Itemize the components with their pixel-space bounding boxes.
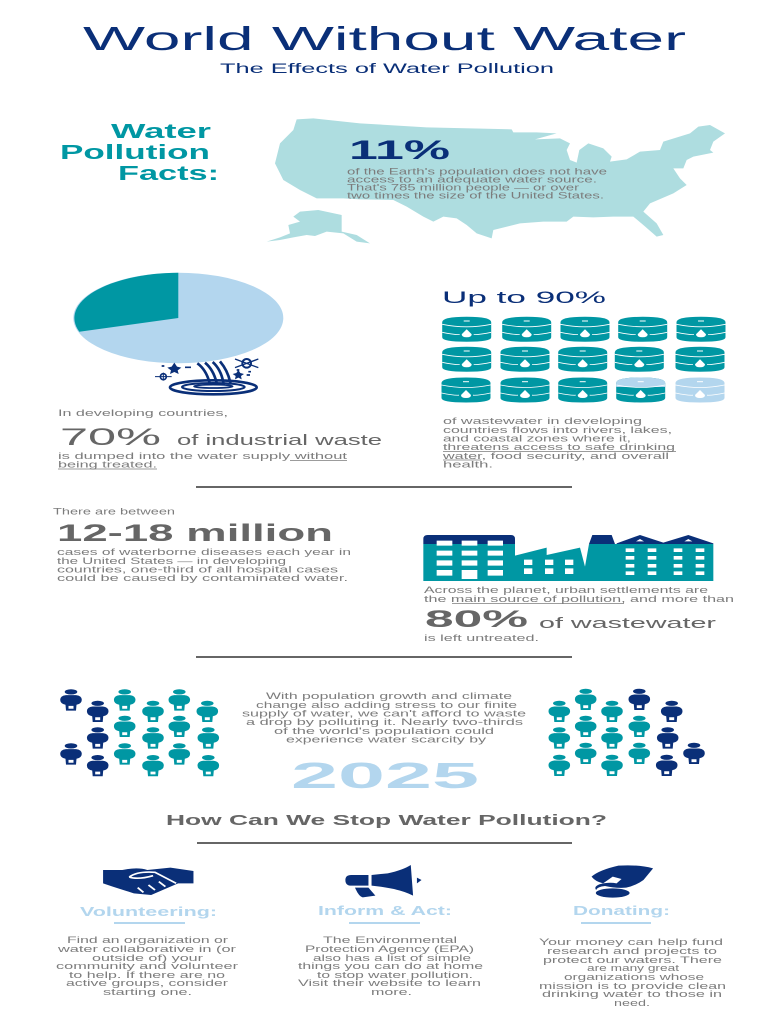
- map: United States: [267, 118, 725, 243]
- column: volunteering: outside of) your: [92, 953, 203, 963]
- text: wastewater description: and coastal zones where it,: [443, 434, 631, 444]
- column: volunteering: active groups, consider: [66, 978, 228, 988]
- column: volunteering: to help. If there are no: [69, 970, 225, 980]
- column: inform and act: things you can do at home: [298, 961, 483, 971]
- icon: handshake: [103, 868, 193, 895]
- text: wastewater description: of wastewater in developing: [443, 416, 642, 426]
- text: 80% of wastewater: the main source of pollution, and more than: [424, 594, 734, 604]
- text: 70% of industrial waste: of industrial waste: [177, 432, 382, 449]
- text: wastewater description: health.: [443, 460, 493, 470]
- text: 12-18 million: There are between: [53, 506, 175, 516]
- text: water scarcity: a drop by polluting it. Nearly two-thirds: [246, 717, 524, 727]
- column: inform and act: Protection Agency (EPA): [305, 944, 474, 954]
- column: donating: Donating:: [573, 903, 670, 918]
- column: donating: need.: [614, 998, 650, 1008]
- icon: factory and city skyline: [423, 535, 713, 581]
- text: 11% description: two times the size of the United States.: [347, 190, 604, 200]
- text: wastewater description: countries flows into rivers, lakes,: [443, 425, 672, 435]
- text: water scarcity: change also adding stress to our finite: [256, 700, 517, 710]
- column: donating: protect our waters. There: [543, 955, 722, 965]
- text: 70% of industrial waste: [58, 408, 382, 470]
- column: volunteering: Find an organization or: [67, 935, 228, 945]
- text: wastewater description: water, food security, and overall: [441, 451, 669, 461]
- icon group: people right: [548, 689, 705, 776]
- column: donating: Your money can help fund: [539, 937, 723, 947]
- icon: polluted waterfall: [155, 359, 258, 394]
- text: 12-18 million: could be caused by contaminated water.: [57, 573, 348, 583]
- icon group: people left: [60, 689, 219, 776]
- column: inform and act: to stop water pollution.: [317, 970, 473, 980]
- column: donating: research and projects to: [547, 946, 717, 956]
- heading: water pollution facts: [60, 121, 219, 185]
- column: volunteering: community and volunteer: [56, 961, 238, 971]
- text: 11% description: [347, 166, 607, 200]
- text: 11% description: That's 785 million people — or over: [347, 182, 579, 192]
- column: volunteering: Volunteering:: [80, 904, 217, 919]
- heading: how can we stop water pollution: How Can We Stop Water Pollution?: [166, 812, 607, 829]
- text: wastewater description: [441, 416, 676, 470]
- column: donating: are many great: [587, 963, 680, 973]
- column: inform and act: The Environmental: [323, 935, 457, 945]
- text: 80% of wastewater: [424, 585, 734, 643]
- text: 70% of industrial waste: In developing countries,: [58, 408, 228, 418]
- text: water scarcity: of the world's population could: [274, 726, 494, 736]
- text: water scarcity: [242, 691, 526, 744]
- heading: water pollution facts: Pollution: [60, 142, 210, 164]
- text: 80% of wastewater: of wastewater: [539, 616, 716, 632]
- text: water scarcity: supply of water, we can't afford to waste: [242, 708, 526, 718]
- pie chart: 70% industrial waste: [73, 273, 283, 363]
- stat: 11%: 11%: [349, 135, 450, 165]
- text: 11% description: of the Earth's population does not have: [347, 166, 607, 176]
- text: 80% of wastewater: 80%: [425, 606, 528, 633]
- text: 70% of industrial waste: 70%: [60, 424, 161, 451]
- column: inform and act: Visit their website to learn: [298, 978, 481, 988]
- heading: water pollution facts: Facts:: [118, 163, 219, 185]
- heading: up to 90%: Up to 90%: [442, 288, 606, 307]
- text: 12-18 million: countries, one-third of all hospital cases: [57, 564, 339, 574]
- icon: megaphone: [345, 865, 422, 897]
- column: inform and act: Inform & Act:: [318, 903, 452, 918]
- heading: water pollution facts: Water: [111, 121, 211, 143]
- text: 11% description: access to an adequate water source.: [347, 174, 597, 184]
- text: 12-18 million: cases of waterborne diseases each year in: [57, 547, 351, 557]
- column: volunteering: water collaborative in (or: [56, 944, 236, 954]
- text: 12-18 million: the United States — in developing: [57, 556, 286, 566]
- column: inform and act: also has a list of simple: [313, 953, 471, 963]
- column: donating: organizations whose: [564, 972, 704, 982]
- text: 80% of wastewater: Across the planet, urban settlements are: [424, 585, 708, 595]
- text: water scarcity: With population growth and climate: [266, 691, 512, 701]
- column: inform and act: [298, 903, 483, 997]
- icon grid: wastewater barrels: [442, 317, 726, 402]
- column: donating: drinking water to those in: [542, 989, 722, 999]
- column: volunteering: [56, 904, 238, 997]
- icon: hand giving coin: [592, 865, 653, 898]
- text: wastewater description: threatens access to safe drinking: [443, 442, 675, 452]
- text: 12-18 million: [53, 506, 351, 583]
- text: 80% of wastewater: is left untreated.: [424, 633, 539, 643]
- subtitle: The Effects of Water Pollution: [220, 61, 554, 76]
- text: water scarcity: experience water scarcity by: [286, 734, 487, 744]
- column: donating: [539, 903, 726, 1008]
- column: inform and act: more.: [371, 987, 412, 997]
- text: 70% of industrial waste: being treated.: [58, 460, 157, 470]
- column: volunteering: starting one.: [103, 987, 192, 997]
- stat: 2025: 2025: [291, 755, 479, 796]
- title: World Without Water: [83, 20, 686, 57]
- text: 12-18 million: 12-18 million: [57, 520, 333, 547]
- column: donating: mission is to provide clean: [539, 981, 726, 991]
- text: 70% of industrial waste: is dumped into the water supply without: [58, 451, 348, 461]
